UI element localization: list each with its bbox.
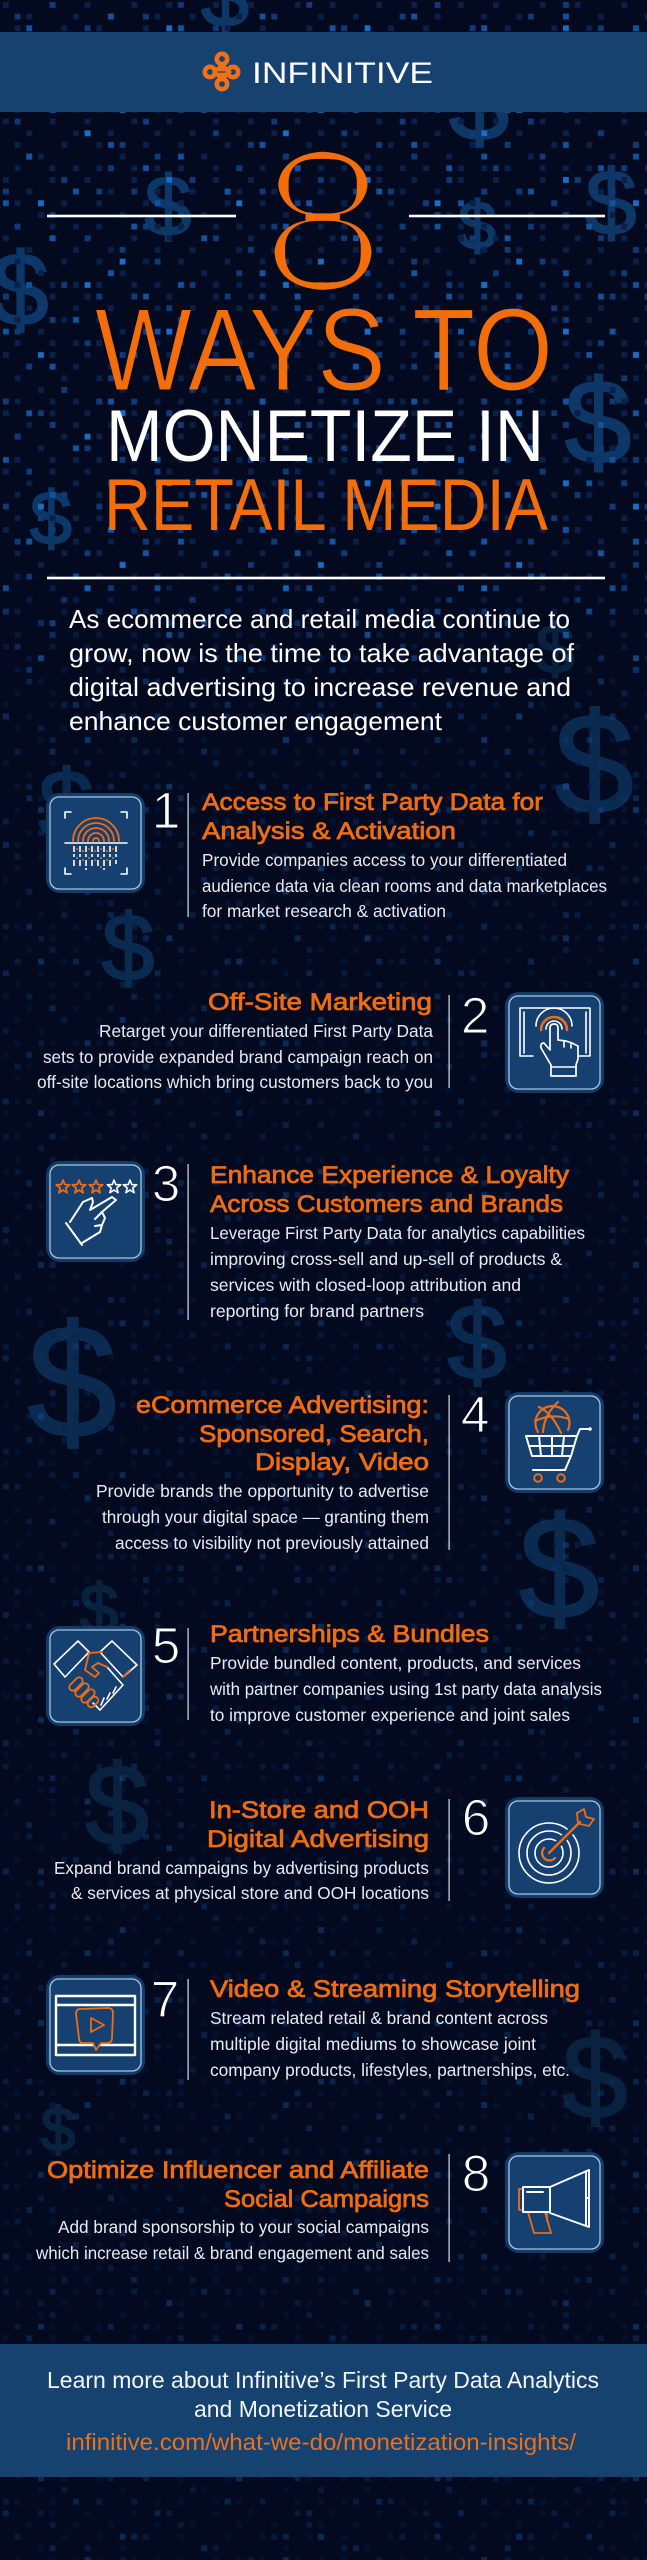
description: services with closed-loop attribution and — [210, 1275, 521, 1295]
description — [209, 1653, 602, 1725]
description — [210, 2008, 570, 2080]
divider — [448, 1799, 450, 1901]
footer link: infinitive.com/what-we-do/monetization-insights/ — [66, 2429, 577, 2455]
description: sets to provide expanded brand campaign reach on — [43, 1047, 433, 1067]
retail media: RETAIL MEDIA — [104, 465, 548, 546]
heading: Video & Streaming Storytelling — [210, 1976, 580, 2003]
description: Add brand sponsorship to your social campaigns — [58, 2217, 429, 2237]
description: Retarget your differentiated First Party Data — [99, 1021, 433, 1041]
description — [202, 850, 607, 921]
heading — [136, 1392, 429, 1476]
footer text: and Monetization Service — [194, 2396, 452, 2422]
icon: target with arrow — [506, 1798, 603, 1897]
heading: Display, Video — [255, 1449, 429, 1476]
item 7 — [47, 1971, 580, 2080]
ways to: WAYS TO — [95, 284, 553, 415]
title — [95, 106, 553, 546]
background dollar signs: $ — [554, 685, 634, 844]
number 7: 7 — [151, 1971, 179, 2028]
background dollar signs: $ — [536, 611, 574, 688]
divider — [448, 1395, 450, 1550]
description: Leverage First Party Data for analytics capabilities — [210, 1223, 585, 1243]
intro text: digital advertising to increase revenue and — [69, 672, 571, 702]
title rule left — [47, 215, 236, 217]
big 8: 8 — [259, 106, 387, 334]
intro text: As ecommerce and retail media continue to — [69, 604, 570, 634]
heading: Off-Site Marketing — [208, 989, 432, 1016]
footer text — [47, 2367, 599, 2455]
intro text: grow, now is the time to take advantage of — [69, 638, 575, 668]
description — [35, 2217, 429, 2263]
item 8 — [35, 2145, 603, 2263]
number 6: 6 — [462, 1789, 490, 1846]
background dollar signs: $ — [145, 159, 191, 253]
background dollar signs: $ — [458, 188, 496, 264]
heading: Social Campaigns — [224, 2186, 429, 2213]
divider — [448, 995, 450, 1088]
icon: shopping cart with globe — [506, 1393, 603, 1492]
item 1 — [47, 782, 607, 921]
heading: Across Customers and Brands — [210, 1191, 563, 1218]
footer text: Learn more about Infinitive’s First Party Data Analytics — [47, 2367, 599, 2393]
description: & services at physical store and OOH locations — [71, 1883, 429, 1903]
background dollar signs: $ — [585, 152, 637, 254]
background dollar signs: $ — [562, 2012, 628, 2144]
description: audience data via clean rooms and data marketplaces — [202, 876, 607, 896]
heading: Digital Advertising — [207, 1826, 429, 1853]
number 4: 4 — [461, 1386, 489, 1443]
heading — [202, 789, 543, 845]
background dollar signs: $ — [519, 1487, 599, 1649]
item 5 — [47, 1617, 602, 1725]
background dollar signs: $ — [447, 1282, 507, 1402]
divider — [188, 1628, 189, 1720]
number 8: 8 — [462, 2145, 490, 2202]
logo — [205, 54, 433, 90]
number 2: 2 — [461, 987, 489, 1044]
icon: video window — [47, 1976, 144, 2074]
intro text — [69, 604, 575, 736]
heading — [47, 2157, 429, 2213]
logo wordmark: INFINITIVE — [252, 57, 433, 90]
description: Provide brands the opportunity to advertise — [96, 1481, 429, 1501]
heading: Analysis & Activation — [202, 818, 456, 845]
background dollar signs: $ — [449, 42, 509, 163]
description: reporting for brand partners — [210, 1301, 424, 1321]
header band — [0, 32, 647, 112]
icon: touch screen — [506, 993, 603, 1092]
description: multiple digital mediums to showcase joint — [210, 2034, 536, 2054]
description: through your digital space — granting them — [102, 1507, 429, 1527]
item 6 — [54, 1789, 603, 1903]
background dollar signs: $ — [30, 476, 72, 560]
number 3: 3 — [152, 1155, 180, 1212]
description: Stream related retail & brand content across — [210, 2008, 548, 2028]
heading: Sponsored, Search, — [199, 1421, 429, 1448]
icon: megaphone — [506, 2153, 603, 2252]
description — [54, 1858, 429, 1903]
background dollar signs: $ — [102, 895, 154, 1001]
heading: In-Store and OOH — [209, 1797, 429, 1824]
heading — [207, 1797, 429, 1853]
divider — [188, 793, 189, 917]
logo icon — [205, 54, 238, 89]
description: Provide companies access to your differentiated — [202, 850, 567, 870]
background dollar signs: $ — [85, 1742, 149, 1870]
footer band — [0, 2344, 647, 2477]
title bottom rule — [47, 577, 605, 579]
heading: Access to First Party Data for — [202, 789, 543, 816]
background dollar signs: $ — [38, 750, 94, 862]
item 4 — [96, 1386, 603, 1553]
icon: star rating — [47, 1162, 144, 1261]
number 5: 5 — [152, 1617, 180, 1674]
description: company products, lifestyles, partnerships, etc. — [210, 2060, 570, 2080]
description: with partner companies using 1st party data analysis — [209, 1679, 602, 1699]
description: for market research & activation — [202, 901, 446, 921]
description: improving cross-sell and up-sell of products & — [210, 1249, 562, 1269]
divider — [188, 1164, 189, 1320]
description: Expand brand campaigns by advertising products — [54, 1858, 429, 1878]
heading — [210, 1162, 570, 1218]
item 3 — [47, 1155, 585, 1321]
description: Provide bundled content, products, and services — [210, 1653, 581, 1673]
icon: fingerprint — [47, 794, 144, 892]
background dollar signs: $ — [565, 355, 631, 489]
title rule right — [409, 215, 605, 217]
heading: Partnerships & Bundles — [210, 1621, 489, 1648]
icon: handshake — [47, 1627, 144, 1725]
divider — [188, 1979, 189, 2080]
number 1: 1 — [152, 782, 180, 839]
heading: Optimize Influencer and Affiliate — [47, 2157, 429, 2184]
background dollar signs: $ — [80, 1570, 118, 1648]
description — [96, 1481, 429, 1553]
divider — [448, 2154, 450, 2262]
item 2 — [37, 987, 603, 1092]
description: off-site locations which bring customers back to you — [37, 1072, 433, 1092]
description — [37, 1021, 433, 1092]
monetize in: MONETIZE IN — [106, 396, 544, 477]
description: access to visibility not previously attained — [115, 1533, 429, 1553]
heading: eCommerce Advertising: — [136, 1392, 429, 1419]
heading: Enhance Experience & Loyalty — [210, 1162, 570, 1189]
background dollar signs: $ — [27, 1292, 117, 1472]
background dollar signs: $ — [41, 2096, 75, 2165]
description: which increase retail & brand engagement and sales — [35, 2243, 429, 2263]
description — [210, 1223, 585, 1321]
intro text: enhance customer engagement — [69, 706, 443, 736]
description: to improve customer experience and joint sales — [210, 1705, 570, 1725]
